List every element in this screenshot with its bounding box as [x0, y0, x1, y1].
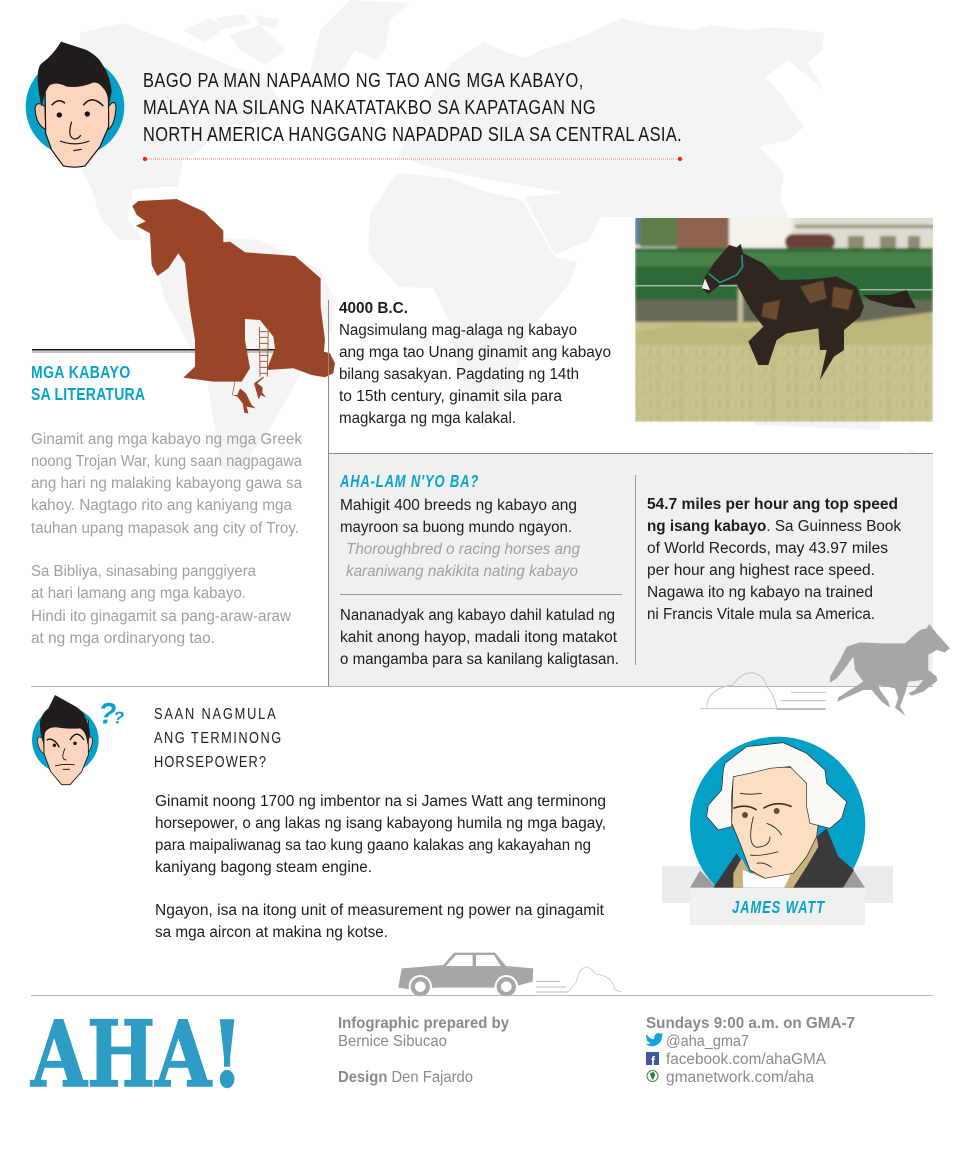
literature text block: at hari lamang ang mga kabayo. [31, 585, 246, 602]
literature text block: ang hari ng malaking kabayong gawa sa [31, 475, 302, 492]
question marks: ? [113, 707, 124, 727]
4000 BC text block: ang mga tao Unang ginamit ang kabayo [339, 344, 611, 361]
heading: aha-lam n'yo ba: AHA-LAM N'YO BA? [339, 472, 479, 492]
show schedule and social links [646, 1015, 855, 1086]
name label: JAMES WATT [732, 898, 825, 918]
horsepower body text: Ngayon, isa na itong unit of measurement ng power na ginagamit [155, 902, 605, 919]
credits: Infographic prepared by [338, 1015, 509, 1032]
horse [702, 244, 916, 380]
panel rules [31, 300, 933, 686]
horsepower body text: Ginamit noong 1700 ng imbentor na si James Watt ang terminong [155, 793, 606, 810]
logo: AHA!: AHA! [30, 1002, 243, 1108]
literature text block: kahoy. Nagtago rito ang kaniyang mga [31, 497, 292, 514]
top speed column: of World Records, may 43.97 miles [647, 540, 888, 557]
literature text block [31, 431, 302, 647]
icon: facebook: f [651, 1054, 656, 1068]
header intro text: BAGO PA MAN NAPAAMO NG TAO ANG MGA KABAYO, [143, 68, 583, 91]
did you know column: Thoroughbred o racing horses ang [346, 541, 580, 558]
did you know column: kahit anong hayop, madali itong matakot [340, 629, 618, 646]
did you know column: mayroon sa buong mundo ngayon. [340, 519, 572, 536]
top speed column: per hour ang highest race speed. [647, 562, 875, 579]
literature text block: tauhan upang mapasok ang city of Troy. [31, 520, 299, 537]
4000 BC text block: Nagsimulang mag-alaga ng kabayo [339, 322, 577, 339]
footer rule [31, 994, 933, 996]
horsepower body text: sa mga aircon at makina ng kotse. [155, 924, 388, 941]
4000 BC text block: 4000 B.C. [339, 300, 408, 317]
question marks: ? [98, 697, 116, 730]
icon: facebook [646, 1052, 659, 1068]
header intro text: MALAYA NA SILANG NAKATATAKBO SA KAPATAGAN NG [143, 95, 596, 118]
heading: mga kabayo sa literatura: MGA KABAYO [31, 364, 130, 382]
top speed column [647, 496, 901, 623]
heading: horsepower question: SAAN NAGMULA [154, 706, 276, 723]
did you know column [340, 497, 622, 668]
heading: mga kabayo sa literatura: SA LITERATURA [31, 386, 145, 404]
4000 BC text block: to 15th century, ginamit sila para [339, 388, 562, 405]
heading: horsepower question [154, 706, 281, 771]
literature text block: noong Trojan War, kung saan nagpagawa [31, 453, 302, 470]
heading: horsepower question: ANG TERMINONG [154, 730, 281, 747]
top speed column: 54.7 miles per hour ang top speed [647, 496, 898, 513]
show schedule and social links: Sundays 9:00 a.m. on GMA-7 [646, 1015, 855, 1032]
literature text block: Sa Bibliya, sinasabing panggiyera [31, 563, 256, 580]
show schedule and social links: gmanetwork.com/aha [666, 1069, 814, 1086]
credits: Design Den Fajardo [338, 1069, 473, 1086]
show schedule and social links: facebook.com/ahaGMA [666, 1051, 826, 1068]
heading: mga kabayo sa literatura [31, 364, 145, 404]
credits: Bernice Sibucao [338, 1033, 447, 1050]
header divider with red dots [143, 157, 682, 161]
did you know column: o mangamba para sa kanilang kaligtasan. [340, 651, 619, 668]
small character: puzzled man [32, 695, 124, 785]
4000 BC text block: bilang sasakyan. Pagdating ng 14th [339, 366, 579, 383]
heading: horsepower question: HORSEPOWER? [154, 754, 266, 771]
4000 BC text block [339, 300, 611, 427]
horsepower body text [155, 793, 606, 941]
literature text block: Hindi ito ginagamit sa pang-araw-araw [31, 608, 292, 625]
climbing soldiers [232, 377, 266, 413]
question marks [98, 697, 124, 730]
icon: running horse with dust cloud [700, 624, 950, 716]
did you know column: Mahigit 400 breeds ng kabayo ang [340, 497, 577, 514]
header intro text: NORTH AMERICA HANGGANG NAPADPAD SILA SA CENTRAL ASIA. [143, 122, 682, 145]
literature text block: Ginamit ang mga kabayo ng mga Greek [31, 431, 302, 448]
photo: galloping horse in field [635, 215, 935, 422]
icon: twitter [646, 1033, 663, 1046]
top speed column: ng isang kabayo. Sa Guinness Book [647, 518, 901, 535]
header intro text [143, 68, 682, 145]
icon: car with dust cloud [398, 953, 621, 997]
did you know column: Nananadyak ang kabayo dahil katulad ng [340, 607, 615, 624]
panel: grey facts background [329, 454, 933, 686]
icon: globe [647, 1070, 658, 1082]
did you know column: karaniwang nakikita nating kabayo [346, 563, 578, 580]
literature text block: at ng mga ordinaryong tao. [31, 630, 215, 647]
world map background [80, 0, 915, 495]
4000 BC text block: magkarga ng mga kalakal. [339, 410, 516, 427]
rope ladder [259, 327, 268, 377]
portrait: James Watt [662, 737, 893, 925]
top speed column: Nagawa ito ng kabayo na trained [647, 584, 873, 601]
show schedule and social links: @aha_gma7 [666, 1033, 749, 1050]
header character: man smiling [26, 42, 124, 167]
top speed column: ni Francis Vitale mula sa America. [647, 606, 875, 623]
credits [338, 1015, 509, 1086]
double rule [32, 349, 276, 352]
trojan horse silhouette [132, 199, 335, 413]
horsepower body text: horsepower, o ang lakas ng isang kabayong humila ng mga bagay, [155, 815, 606, 832]
horsepower body text: para maipaliwanag sa tao kung gaano kalakas ang kakayahan ng [155, 837, 591, 854]
horsepower body text: kaniyang bagong steam engine. [155, 859, 372, 876]
